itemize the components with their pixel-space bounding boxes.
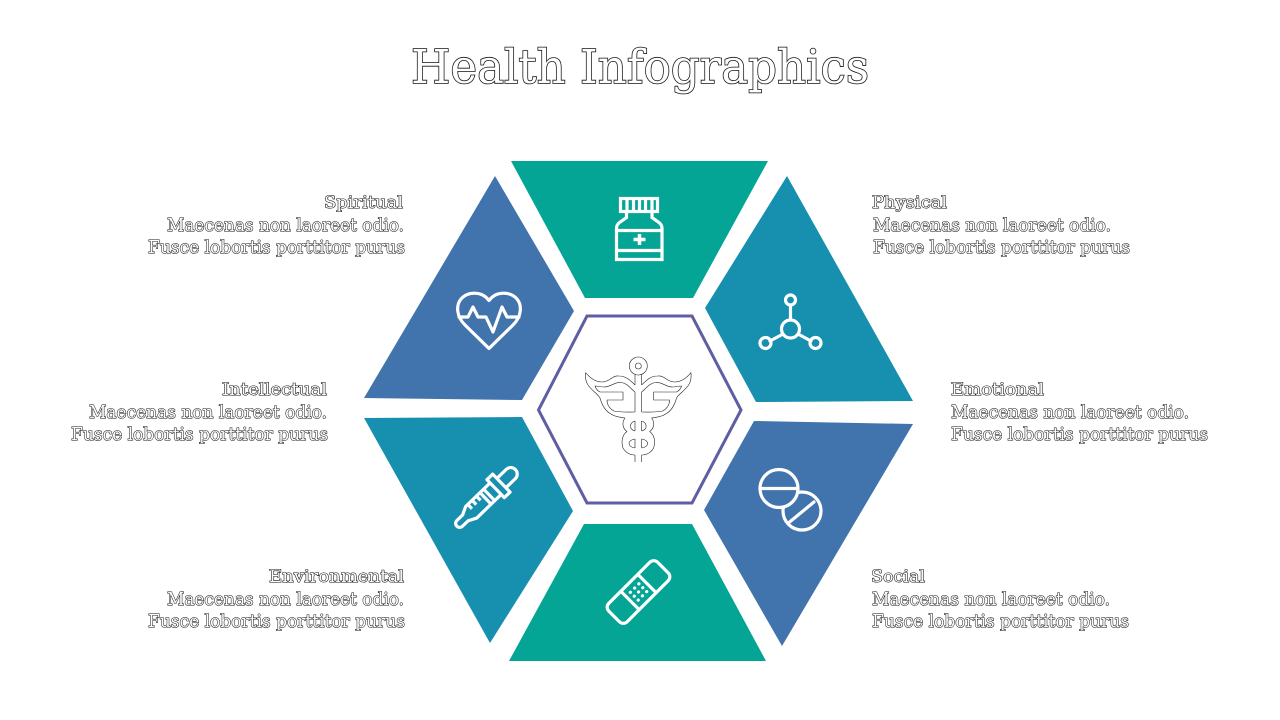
text block: Environmental xyxy=(148,567,405,632)
segment: top left xyxy=(364,176,574,400)
text block: Spiritual: Maecenas non laoreet odio. xyxy=(167,215,404,236)
text block: Social: Maecenas non laoreet odio. xyxy=(872,589,1110,610)
text block: Emotional: Fusce lobortis porttitor purus xyxy=(951,424,1208,445)
text block: Physical: Fusce lobortis porttitor purus xyxy=(873,237,1130,258)
text block: Social: Fusce lobortis porttitor purus xyxy=(872,611,1129,632)
segment: top right xyxy=(705,176,913,402)
text block: Physical: Maecenas non laoreet odio. xyxy=(873,215,1111,236)
icon: dropper xyxy=(448,461,524,535)
text block: Emotional xyxy=(951,380,1208,445)
center hexagon xyxy=(538,316,741,503)
text block: Physical xyxy=(872,193,1130,258)
text block: Emotional: Emotional xyxy=(951,380,1044,399)
title: Health Infographics xyxy=(411,40,869,95)
icon: pills xyxy=(760,470,821,530)
text block: Social xyxy=(871,567,1129,632)
text block: Intellectual xyxy=(71,380,328,445)
segment: bottom teal xyxy=(509,524,766,661)
icon: medicine bottle xyxy=(616,198,662,260)
icon: molecule xyxy=(760,295,821,348)
text block: Physical: Physical xyxy=(872,193,947,212)
text block: Spiritual: Fusce lobortis porttitor purus xyxy=(148,237,405,258)
icon: caduceus xyxy=(585,357,691,462)
text block: Spiritual: Spiritual xyxy=(324,193,403,212)
text block: Spiritual xyxy=(148,193,405,258)
text block: Emotional: Maecenas non laoreet odio. xyxy=(951,402,1189,423)
text block: Intellectual: Fusce lobortis porttitor purus xyxy=(71,424,328,445)
segment: bottom right xyxy=(704,421,913,646)
text block: Environmental: Maecenas non laoreet odio. xyxy=(167,589,404,610)
text block: Intellectual: Intellectual xyxy=(222,380,327,399)
icon: heart with pulse xyxy=(458,293,520,348)
segment: bottom left xyxy=(364,417,573,643)
icon: bandage xyxy=(605,558,672,626)
text block: Environmental: Fusce lobortis porttitor purus xyxy=(148,611,405,632)
text block: Social: Social xyxy=(871,567,925,586)
text block: Intellectual: Maecenas non laoreet odio. xyxy=(89,402,327,423)
segment: top teal xyxy=(511,161,768,298)
text block: Environmental: Environmental xyxy=(269,567,404,586)
